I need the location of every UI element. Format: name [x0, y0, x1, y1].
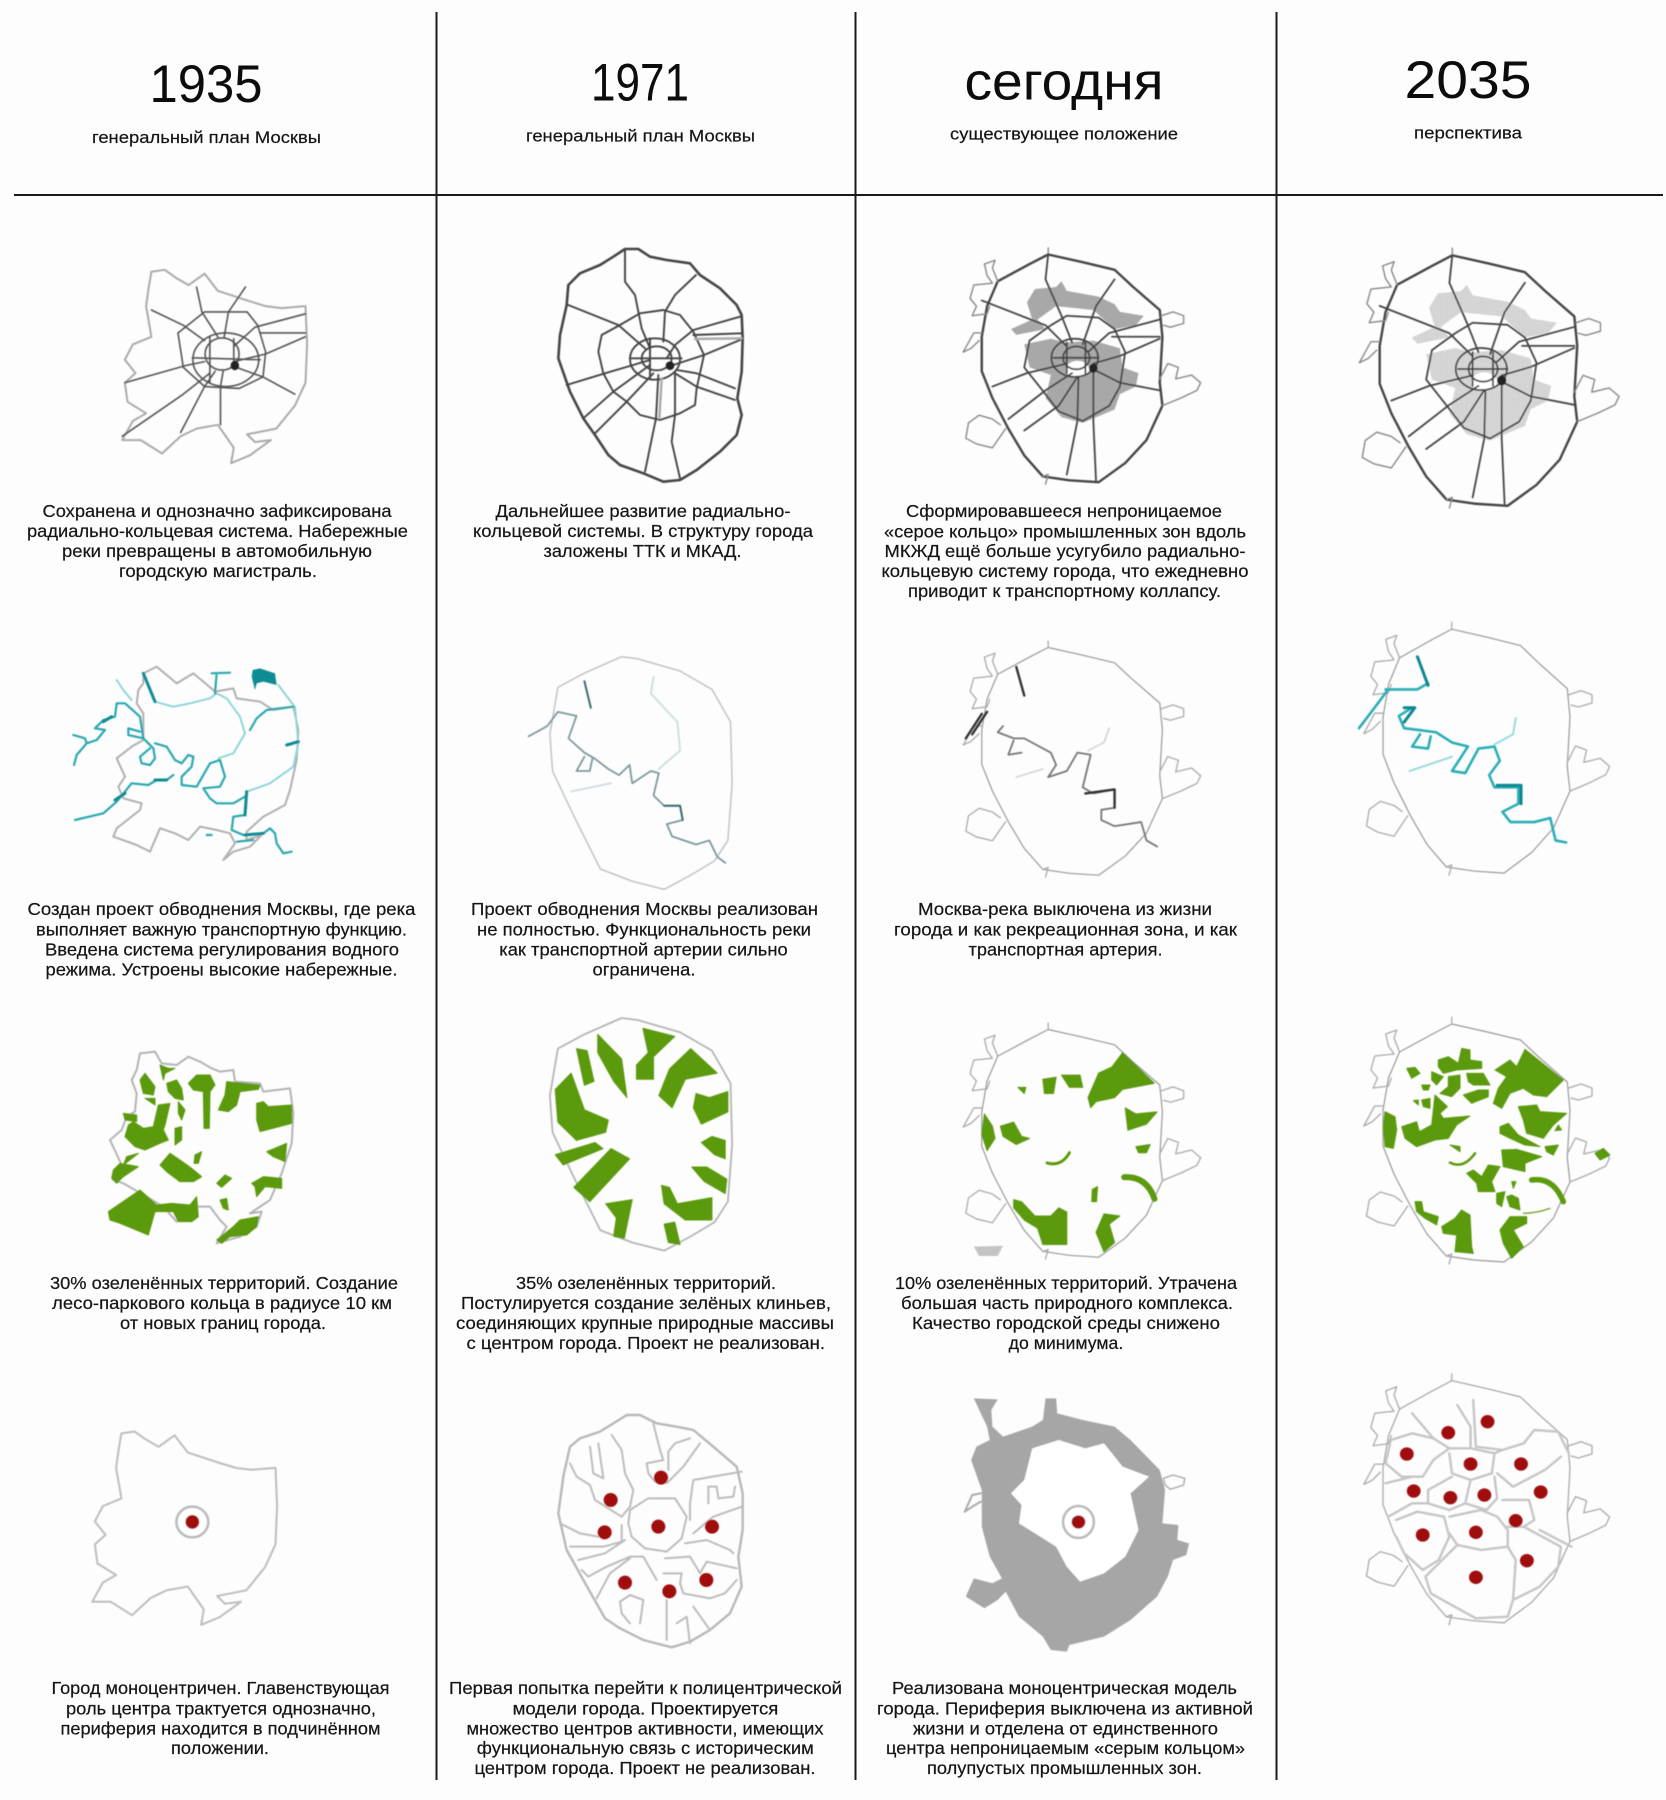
text: today road network: «серое кольцо» промышленных зон вдоль	[884, 522, 1246, 542]
text: 1971 river	[471, 899, 818, 980]
text: 1935 green areas: 30% озеленённых территорий. Создание	[50, 1273, 398, 1293]
text: 1935 monocentric: периферия находится в подчинённом	[60, 1718, 381, 1738]
text: today green areas	[895, 1273, 1237, 1353]
map: 1935 river	[73, 667, 298, 860]
column header: 1971	[526, 54, 755, 146]
column header: 2035: перспектива	[1414, 124, 1523, 142]
column header: 2035	[1404, 51, 1532, 142]
text: 1935 green areas	[50, 1273, 398, 1333]
map: 2035 road network	[1359, 248, 1619, 508]
text: 1935 road network: радиально-кольцевая система. Набережные	[27, 521, 408, 541]
text: today river	[894, 899, 1237, 960]
text: today river: Москва-река выключена из жизни	[918, 899, 1212, 919]
text: 1935 river	[28, 899, 416, 980]
text: 1935 green areas: лесо-паркового кольца в радиусе 10 км	[52, 1293, 392, 1313]
map: today green areas	[963, 1023, 1201, 1259]
text: 1935 road network: городскую магистраль.	[119, 561, 317, 581]
map: 1935 road network	[122, 270, 307, 463]
text: 1971 polycentric: множество центров активности, имеющих	[466, 1718, 824, 1738]
text: 1971 green wedges: 35% озеленённых территорий.	[516, 1273, 776, 1293]
text: today monocentric: города. Периферия выключена из активной	[877, 1698, 1253, 1718]
map: 1971 polycentric	[558, 1415, 743, 1647]
text: 1935 green areas: от новых границ города.	[120, 1313, 326, 1333]
text: today green areas: Качество городской среды снижено	[912, 1313, 1220, 1333]
text: 1971 river: Проект обводнения Москвы реализован	[471, 899, 818, 919]
text: today monocentric: полупустых промышленных зон.	[927, 1758, 1202, 1778]
column header: 1971: 1971	[591, 54, 689, 112]
text: 1971 river: ограничена.	[592, 960, 696, 980]
column header: 1935: генеральный план Москвы	[92, 128, 321, 147]
text: today monocentric: жизни и отделена от единственного	[913, 1718, 1218, 1738]
column header: today	[950, 52, 1178, 144]
text: today road network: Сформировавшееся непроницаемое	[906, 501, 1222, 521]
map: 1935 green areas	[108, 1052, 293, 1243]
text: today river: города и как рекреационная зона, и как	[894, 920, 1237, 940]
text: 1935 monocentric	[52, 1678, 390, 1758]
text: 1935 monocentric: роль центра трактуется однозначно,	[66, 1698, 376, 1718]
map: 2035 polycentric cells	[1364, 1374, 1610, 1625]
text: 1935 monocentric: положении.	[171, 1738, 269, 1758]
text: 1935 road network	[27, 501, 408, 581]
map: 2035 river	[1359, 622, 1610, 875]
text: 1971 polycentric: функциональную связь с историческим	[477, 1738, 814, 1758]
text: 1971 road network: кольцевой системы. В структуру города	[473, 521, 813, 541]
text: today road network: кольцевую систему города, что ежедневно	[882, 561, 1248, 581]
column header: today: существующее положение	[950, 124, 1178, 144]
text: today river: транспортная артерия.	[968, 940, 1162, 960]
map: today road network with grey ring	[963, 248, 1201, 484]
text: today green areas: 10% озеленённых территорий. Утрачена	[895, 1273, 1237, 1293]
text: today road network: МКЖД ещё больше усугубило радиально-	[884, 541, 1246, 561]
text: today road network	[882, 501, 1248, 601]
map: 1971 river	[529, 657, 732, 889]
text: 1935 river: Создан проект обводнения Москвы, где река	[28, 899, 416, 919]
text: 1971 green wedges: соединяющих крупные природные массивы	[456, 1313, 834, 1333]
text: 1971 polycentric	[449, 1678, 842, 1778]
text: 1971 polycentric: центром города. Проект не реализован.	[474, 1758, 816, 1778]
text: 1971 road network: Дальнейшее развитие радиально-	[496, 501, 791, 521]
text: 1971 road network	[473, 501, 813, 561]
text: 1935 road network: реки превращены в автомобильную	[62, 541, 372, 561]
text: 1971 polycentric: Первая попытка перейти к полицентрической	[449, 1678, 842, 1698]
column header: 1971: генеральный план Москвы	[526, 126, 755, 146]
text: 1935 river: выполняет важную транспортную функцию.	[36, 920, 407, 940]
text: 1971 green wedges: Постулируется создание зелёных клиньев,	[461, 1293, 831, 1313]
text: today road network: приводит к транспортному коллапсу.	[908, 581, 1221, 601]
column header: 2035: 2035	[1404, 51, 1532, 110]
column header: today: сегодня	[964, 52, 1164, 112]
text: 1971 river: не полностью. Функциональность реки	[477, 920, 811, 940]
text: today green areas: до минимума.	[1009, 1333, 1123, 1353]
map: 2035 green areas	[1364, 1017, 1610, 1264]
text: 1935 river: Введена система регулирования водного	[45, 940, 399, 960]
map: 1935 monocentric	[92, 1432, 277, 1625]
map: 1971 green wedges	[550, 1018, 732, 1251]
map: 1971 road network	[558, 249, 743, 482]
text: 1971 polycentric: модели города. Проектируется	[513, 1698, 778, 1718]
text: today green areas: большая часть природного комплекса.	[901, 1293, 1233, 1313]
text: 1971 river: как транспортной артерии сильно	[499, 940, 788, 960]
column header: 1935	[92, 55, 321, 147]
text: 1935 road network: Сохранена и однозначно зафиксирована	[42, 501, 392, 521]
text: 1971 road network: заложены ТТК и МКАД.	[544, 541, 742, 561]
column header: 1935: 1935	[150, 55, 262, 114]
text: today monocentric: центра непроницаемым «серым кольцом»	[886, 1738, 1245, 1758]
text: today monocentric	[877, 1678, 1253, 1778]
text: today monocentric: Реализована моноцентрическая модель	[892, 1678, 1237, 1698]
map: today river	[963, 641, 1201, 877]
text: 1935 monocentric: Город моноцентричен. Главенствующая	[52, 1678, 390, 1698]
map: today monocentric with grey ring	[965, 1398, 1189, 1652]
text: 1971 green wedges	[456, 1273, 834, 1353]
text: 1935 river: режима. Устроены высокие набережные.	[46, 960, 397, 980]
text: 1971 green wedges: с центром города. Проект не реализован.	[466, 1333, 825, 1353]
